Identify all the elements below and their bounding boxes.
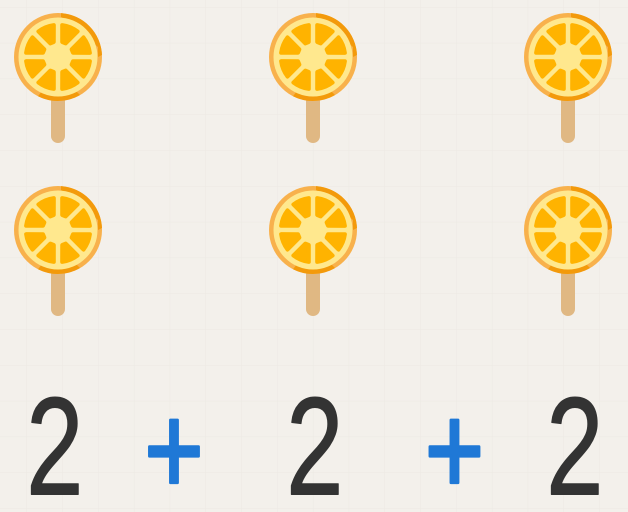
lollipop row 1 column 2 [269, 13, 357, 143]
lollipop row 2 column 2 [269, 186, 357, 316]
lollipop row 2 column 3 [524, 186, 612, 316]
lollipop row 2 column 1 [14, 186, 102, 316]
lollipop row 1 column 3 [524, 13, 612, 143]
lollipop row 1 column 1 [14, 13, 102, 143]
